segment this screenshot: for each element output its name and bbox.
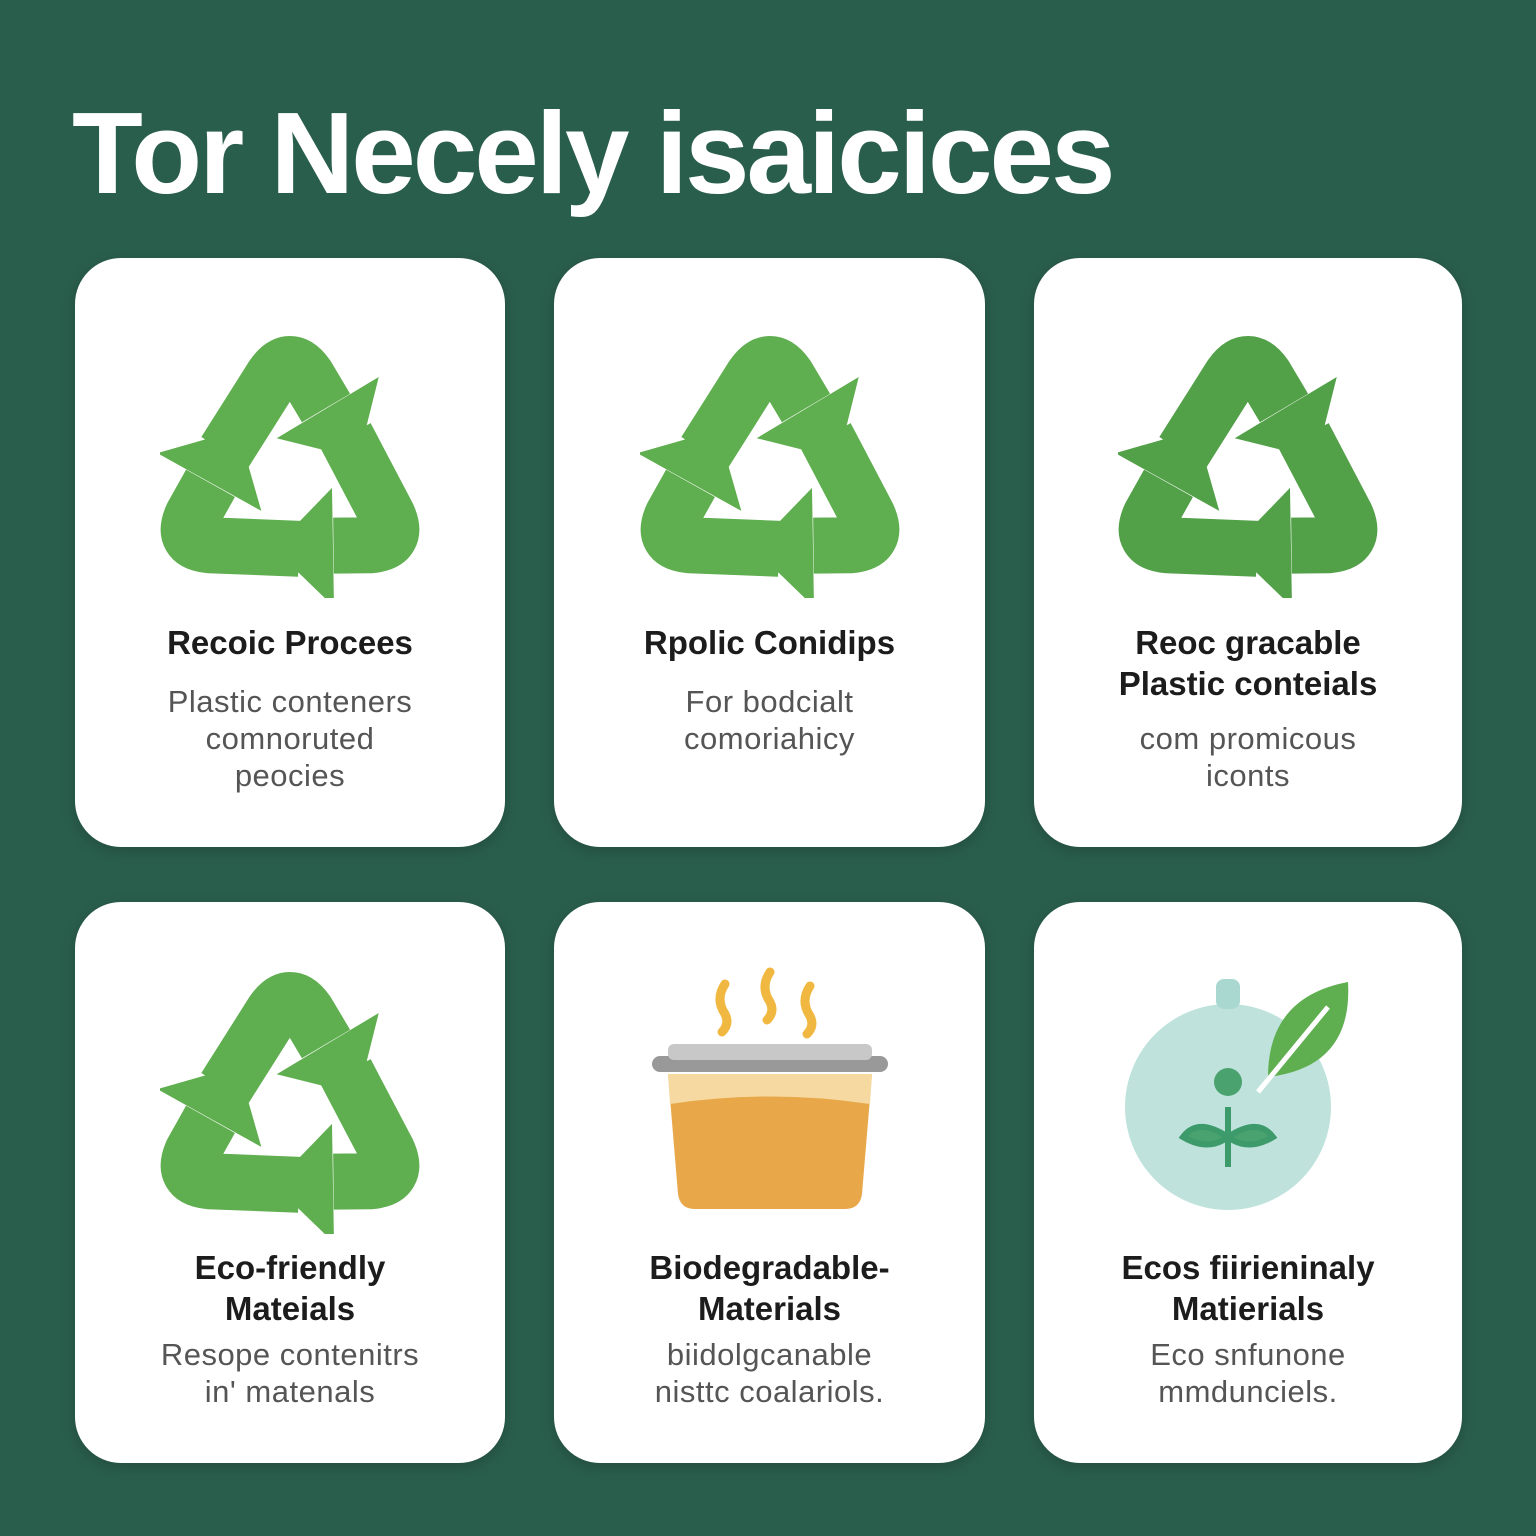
icon: eco globe with leaf bbox=[1125, 979, 1348, 1210]
text: in' matenals bbox=[205, 1374, 375, 1409]
text: Plastic conteners bbox=[168, 684, 412, 719]
text bbox=[684, 684, 855, 756]
text: nisttc coalariols. bbox=[655, 1374, 884, 1409]
heading: Ecos fiirieninaly bbox=[1121, 1249, 1375, 1286]
text: peocies bbox=[235, 758, 345, 793]
text: mmdunciels. bbox=[1158, 1374, 1338, 1409]
heading: Reoc gracable bbox=[1135, 624, 1361, 661]
text: iconts bbox=[1206, 758, 1290, 793]
text bbox=[1140, 721, 1356, 793]
heading bbox=[1121, 1249, 1375, 1327]
heading bbox=[649, 1249, 890, 1327]
heading: Eco-friendly bbox=[195, 1249, 385, 1286]
card 3 bbox=[1034, 258, 1462, 847]
card 5 bbox=[554, 902, 985, 1463]
text: biidolgcanable bbox=[667, 1337, 872, 1372]
text: comoriahicy bbox=[684, 721, 855, 756]
icon: recycle bbox=[160, 972, 420, 1234]
heading bbox=[195, 1249, 386, 1327]
title: Tor Necely isaicices bbox=[72, 88, 1113, 218]
text: For bodcialt bbox=[686, 684, 853, 719]
text: comnoruted bbox=[206, 721, 374, 756]
heading: Rpolic Conidips bbox=[644, 624, 895, 661]
text bbox=[168, 684, 412, 793]
text bbox=[1150, 1337, 1346, 1409]
heading: Matierials bbox=[1172, 1290, 1324, 1327]
heading bbox=[1119, 624, 1377, 702]
heading: Mateials bbox=[225, 1290, 355, 1327]
card 6 bbox=[1034, 902, 1462, 1463]
heading: Materials bbox=[698, 1290, 841, 1327]
heading: Plastic conteials bbox=[1119, 665, 1377, 702]
text: Eco snfunone bbox=[1150, 1337, 1346, 1372]
text: Resope contenitrs bbox=[161, 1337, 419, 1372]
card 1 bbox=[75, 258, 505, 847]
text bbox=[655, 1337, 884, 1409]
icon: recycle bbox=[160, 336, 420, 598]
heading: Recoic Procees bbox=[167, 624, 413, 661]
card 4 bbox=[75, 902, 505, 1463]
heading: Biodegradable- bbox=[649, 1249, 890, 1286]
text: com promicous bbox=[1140, 721, 1356, 756]
text bbox=[161, 1337, 419, 1409]
card 2 bbox=[554, 258, 985, 847]
icon: recycle bbox=[640, 336, 900, 598]
icon: food container bbox=[652, 968, 888, 1209]
icon: recycle bbox=[1118, 336, 1378, 598]
